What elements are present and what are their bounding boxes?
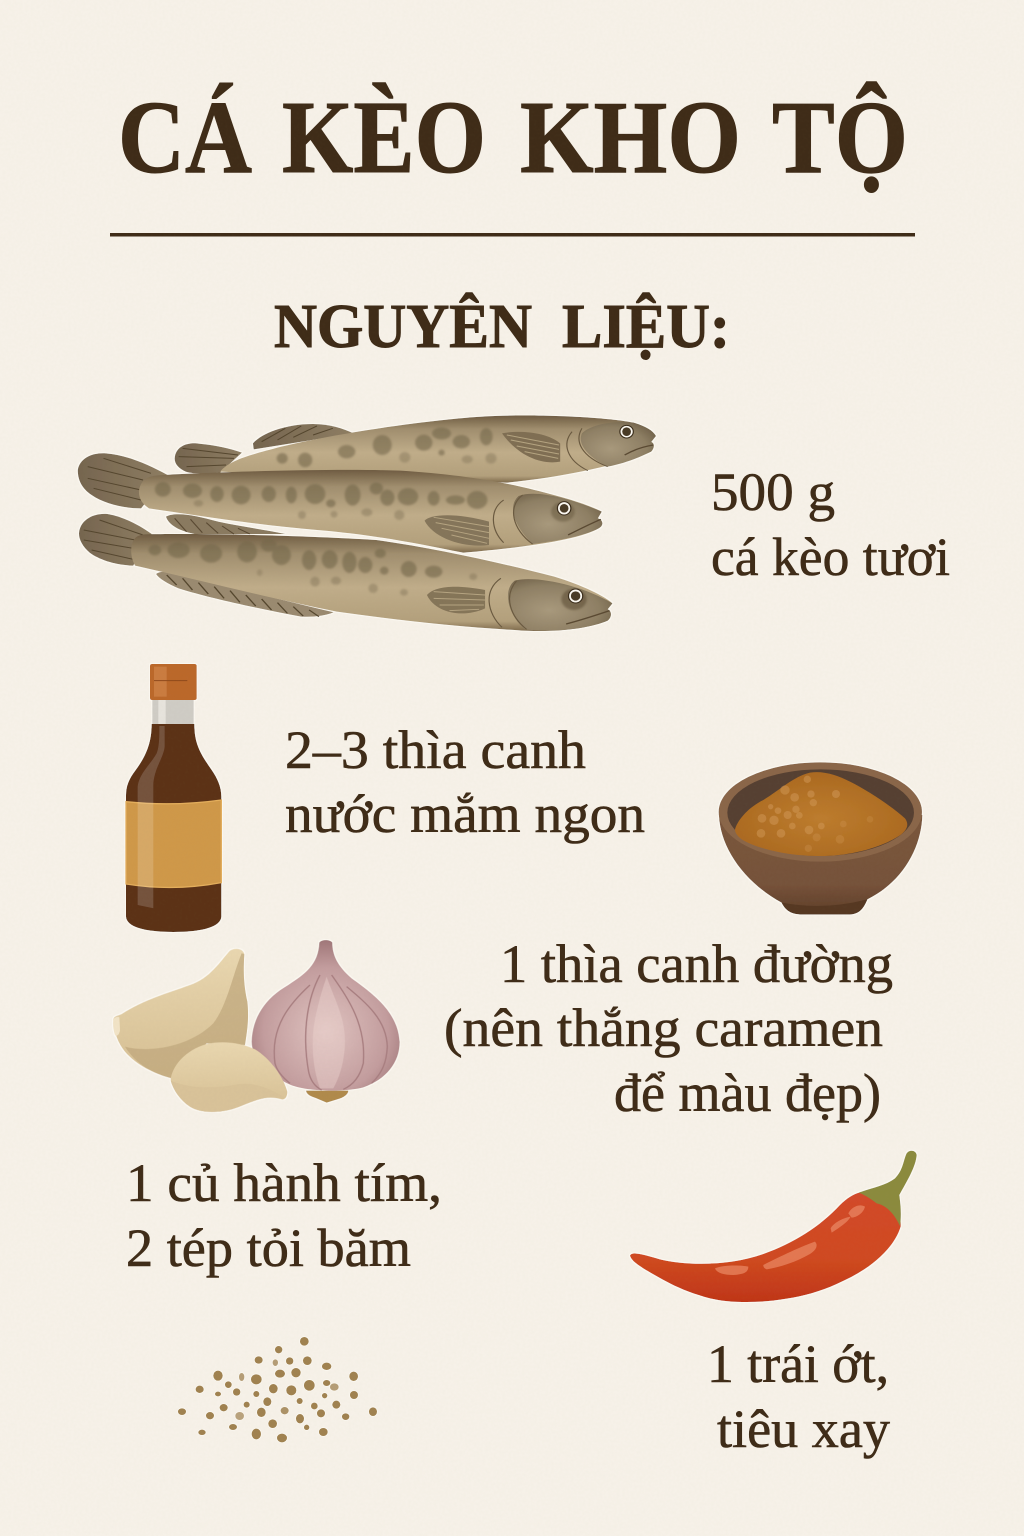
sugar heap xyxy=(735,772,907,856)
text: sugar: (nên thắng caramen xyxy=(444,998,883,1058)
foot shadow xyxy=(782,899,867,914)
bowl body xyxy=(719,815,922,914)
title: TỘ xyxy=(772,80,908,195)
heading: ingredients xyxy=(274,293,730,361)
sugar grains xyxy=(757,776,873,852)
chili stem xyxy=(859,1151,917,1226)
text: sugar: để màu đẹp) xyxy=(614,1063,881,1123)
illustration: fish sauce bottle xyxy=(126,664,221,932)
text: fish quantity: 500 g xyxy=(711,462,835,522)
text: fish quantity: cá kèo tươi xyxy=(711,527,950,587)
text: sugar xyxy=(444,934,893,1123)
heading: ingredients: NGUYÊN xyxy=(274,293,532,361)
text: chili and pepper: 1 trái ớt, xyxy=(707,1334,889,1394)
chili highlights xyxy=(715,1205,865,1275)
bottle body xyxy=(126,724,221,932)
large garlic clove xyxy=(113,949,248,1078)
text: fish sauce: nước mắm ngon xyxy=(285,784,645,844)
small garlic clove xyxy=(171,1042,287,1112)
text: sugar: 1 thìa canh đường xyxy=(500,934,893,994)
text: chili and pepper xyxy=(707,1334,890,1459)
bowl rim xyxy=(719,762,922,862)
bottle label xyxy=(126,800,221,888)
text: fish quantity xyxy=(711,462,950,587)
text: shallot and garlic: 2 tép tỏi băm xyxy=(126,1218,411,1278)
text: chili and pepper: tiêu xay xyxy=(717,1399,890,1459)
text: shallot and garlic xyxy=(126,1153,442,1278)
text: fish sauce xyxy=(285,720,645,844)
illustration: red chili xyxy=(630,1151,917,1302)
heading: ingredients: LIỆU: xyxy=(562,293,730,361)
bottle collar xyxy=(152,700,194,724)
title divider xyxy=(110,233,915,236)
fish: bottom xyxy=(79,514,612,631)
text: fish sauce: 2–3 thìa canh xyxy=(285,720,586,780)
chili body xyxy=(630,1192,901,1302)
title: CÁ xyxy=(118,80,252,195)
text: shallot and garlic: 1 củ hành tím, xyxy=(126,1153,442,1213)
bottle cap xyxy=(150,664,197,700)
illustration: garlic and shallot xyxy=(113,940,400,1112)
fish: middle xyxy=(78,453,602,553)
shallot roots xyxy=(306,1091,348,1103)
title xyxy=(118,80,908,195)
illustration: three fish xyxy=(78,415,656,631)
title: KHO xyxy=(520,80,741,195)
title: KÈO xyxy=(282,80,486,195)
fish: top xyxy=(175,415,656,483)
shallot bulb xyxy=(252,940,400,1091)
bottle highlight xyxy=(138,726,165,908)
illustration: ground pepper xyxy=(178,1337,377,1442)
illustration: bowl of sugar xyxy=(719,762,922,914)
